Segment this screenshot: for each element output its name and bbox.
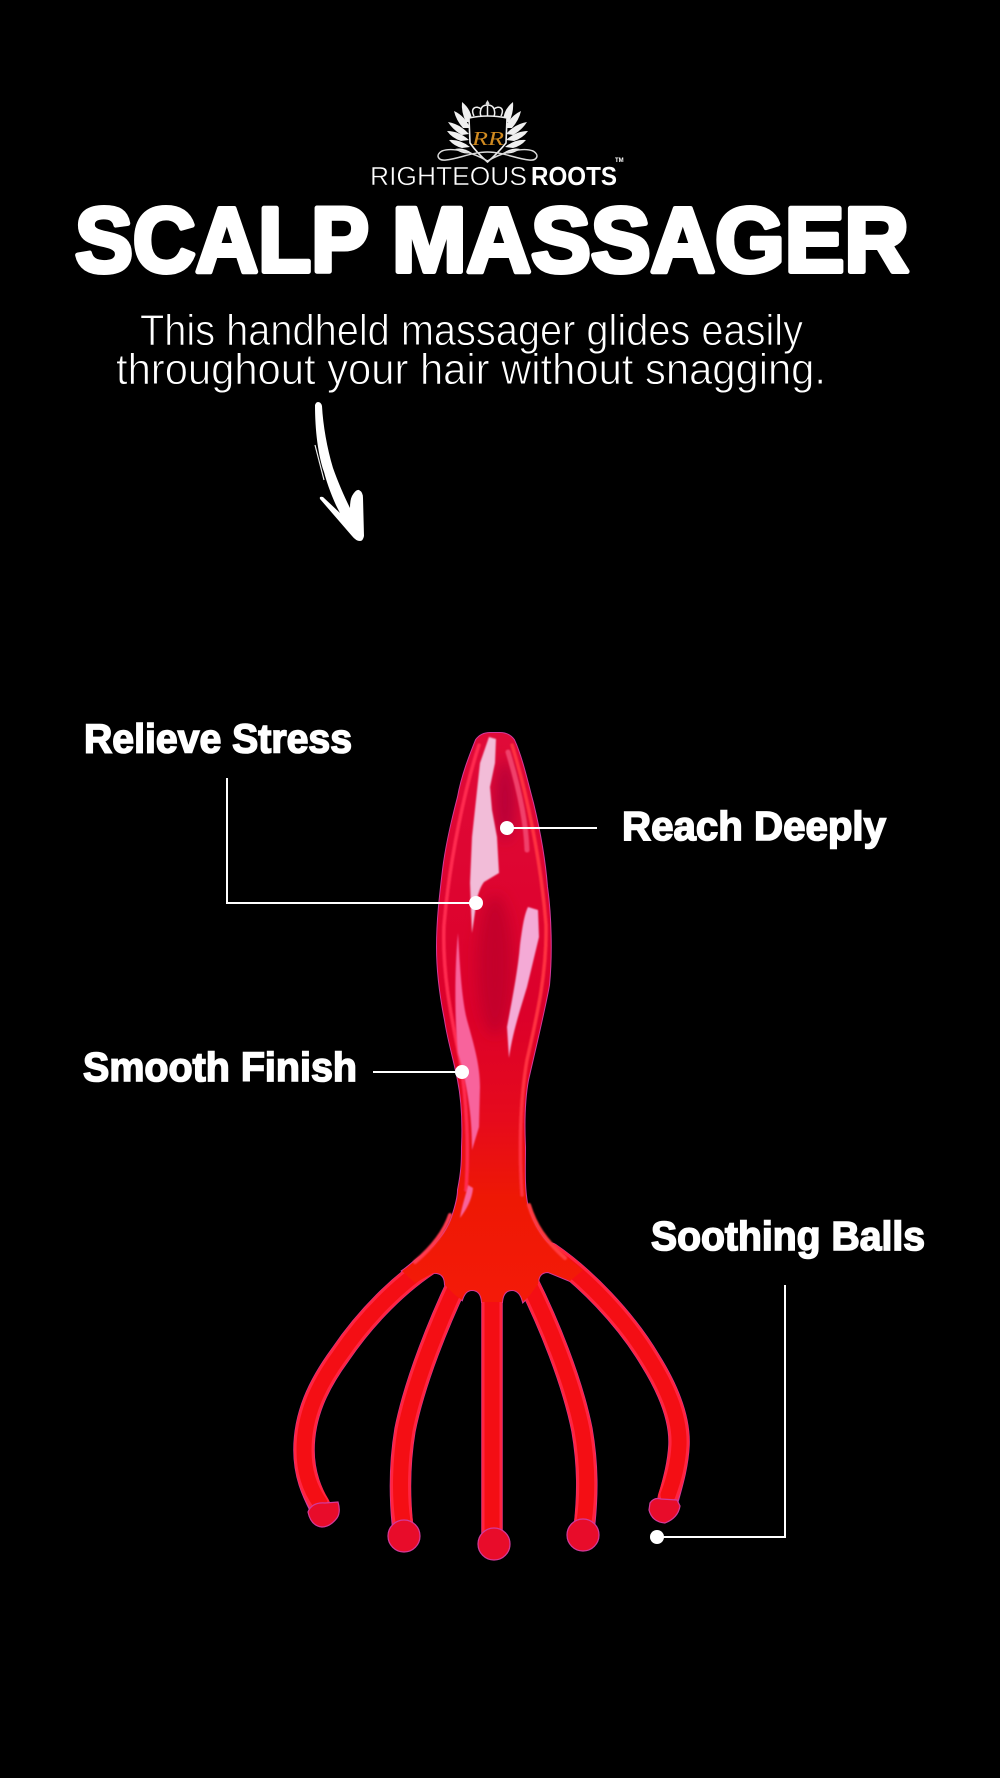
- logo wordmark: ROOTS: [531, 161, 617, 191]
- logo wordmark: [370, 158, 624, 191]
- logo: Righteous Roots: [370, 100, 624, 191]
- callout: Soothing Balls: [650, 1213, 925, 1544]
- title: MASSAGER: [392, 190, 909, 292]
- handle shading: [477, 760, 515, 1035]
- massager handle and palm: [402, 733, 583, 1302]
- callout: Smooth Finish: Smooth Finish: [83, 1044, 357, 1090]
- massager palm outline: [402, 733, 583, 1302]
- callout: Reach Deeply: [500, 803, 886, 849]
- handle highlights: [455, 737, 539, 1218]
- logo wordmark: RIGHTEOUS: [370, 161, 527, 191]
- logo icon: winged crest: RR: [471, 128, 504, 150]
- subtitle text: [116, 306, 826, 394]
- massager tines outline: [304, 1253, 679, 1540]
- subtitle text: throughout your hair without snagging.: [116, 345, 826, 394]
- massager tines rim: [304, 1253, 679, 1533]
- logo icon: winged crest: [438, 100, 537, 162]
- arrow: [315, 402, 364, 541]
- callout: Soothing Balls: Soothing Balls: [651, 1213, 925, 1259]
- logo wordmark: TM: [615, 158, 624, 164]
- callout: Relieve Stress: Relieve Stress: [84, 716, 352, 762]
- callout: Reach Deeply: Reach Deeply: [622, 803, 886, 849]
- massager balls: [308, 1498, 680, 1560]
- title: SCALP: [75, 190, 369, 292]
- callout: Relieve Stress: [84, 716, 483, 910]
- massager tines core: [304, 1253, 679, 1530]
- title: [75, 190, 909, 292]
- subtitle text: This handheld massager glides easily: [140, 306, 803, 355]
- handle rim light: [415, 745, 565, 1262]
- product: red scalp massager: [304, 733, 680, 1560]
